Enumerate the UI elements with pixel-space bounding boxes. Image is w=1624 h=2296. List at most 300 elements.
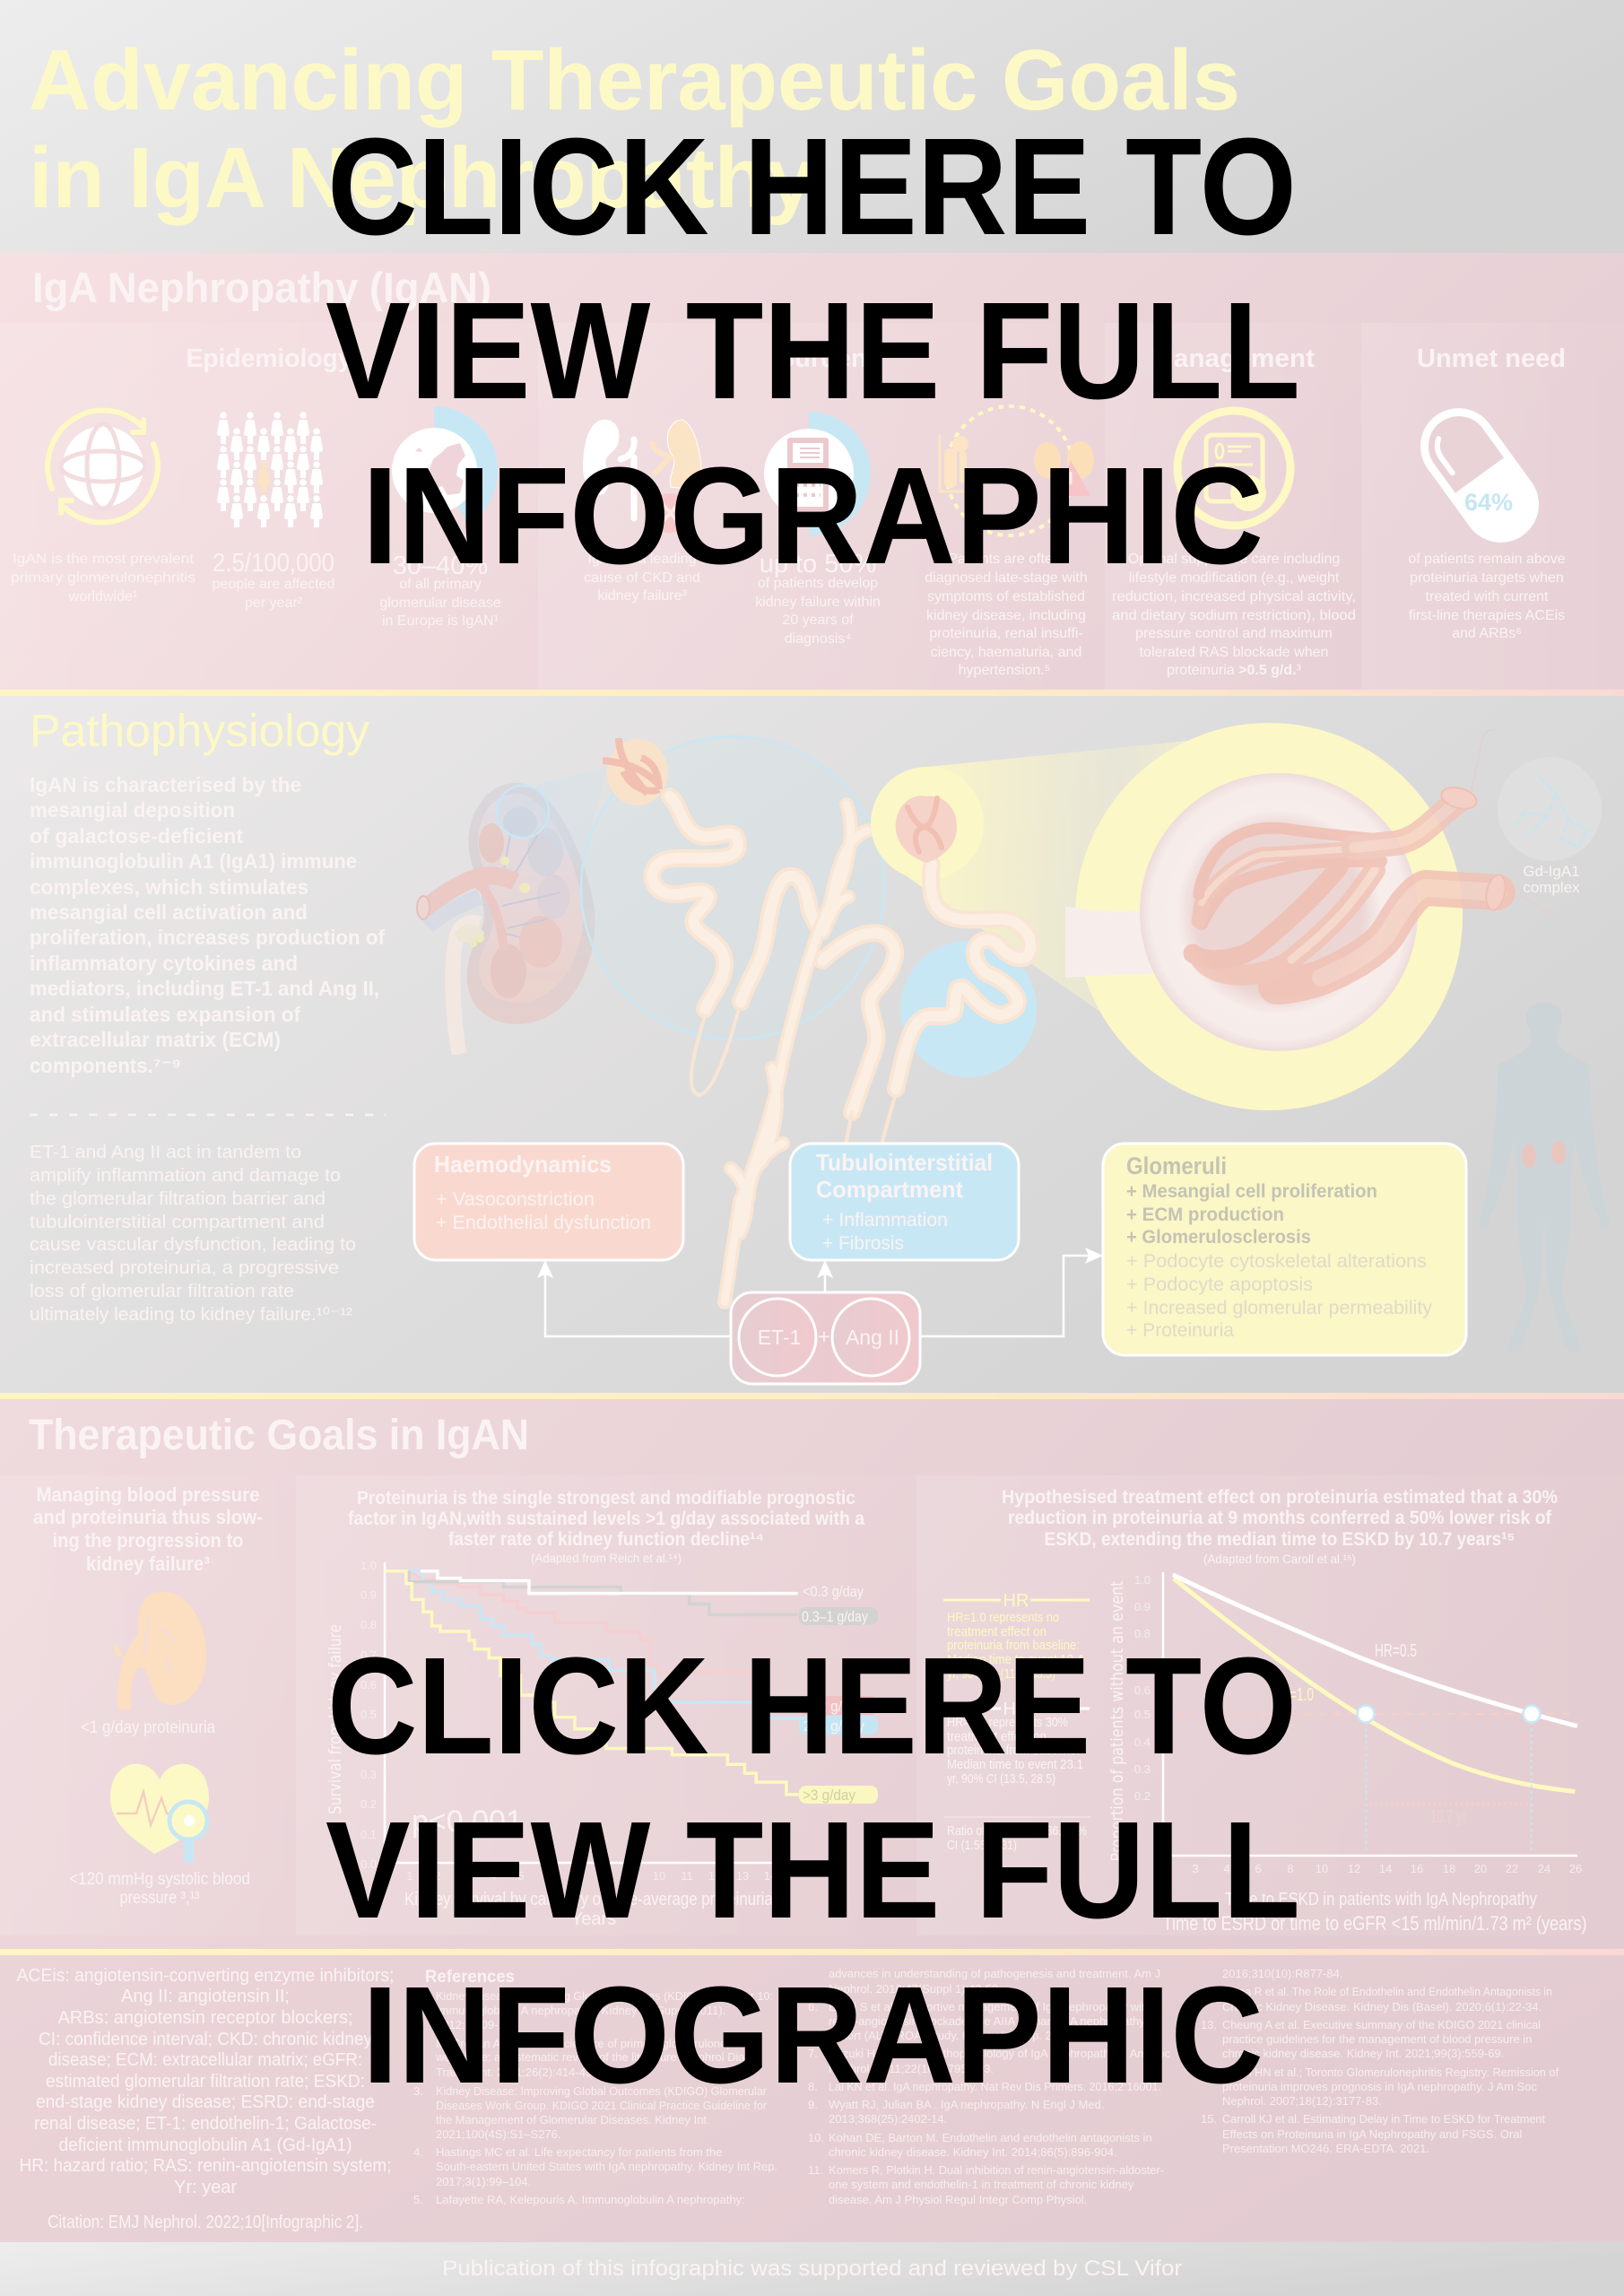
references column 2: disease. Am J Physiol Regul Integr Comp Physiol. [829, 2193, 1087, 2206]
unmet need text: of patients remain above [1408, 552, 1566, 567]
illustration: second tubule [896, 796, 1030, 1089]
curves and markers [1173, 1575, 1577, 1853]
references column 1: McGrogan A et al. The incidence of primary glomerulonephritis [436, 2037, 758, 2050]
subheading: Burden: Burden [776, 344, 867, 373]
references heading: References [425, 1968, 515, 1987]
x tick labels: 4 [490, 1869, 497, 1883]
references column 2: advances in understanding of pathogenesis and treatment. Am J [829, 1967, 1160, 1980]
y axis title: Proportion of patients without an event [1107, 1580, 1127, 1862]
abbreviations: Ang II: angiotensin II; [121, 1987, 290, 2006]
references column 1: 5. [413, 2193, 423, 2206]
legend: HR definitions: HR=1.0 represents no [947, 1610, 1059, 1625]
x tick labels: 2 [434, 1869, 441, 1883]
icon: globe [48, 411, 158, 523]
burden text 2: 20 years of [782, 613, 854, 628]
curves [385, 1571, 801, 1795]
label: blood pressure goal [69, 1870, 250, 1908]
references column 1: 2012;2:209-17. [436, 2018, 514, 2031]
illustration: large glomerulus [1065, 729, 1552, 1051]
y tick labels: 0.5 [360, 1708, 377, 1721]
text: treatment effect heading: ESKD, extending the median time to ESKD by 10.7 years¹⁵ [1044, 1529, 1515, 1550]
epidemiology text 1 [11, 552, 195, 604]
unmet need text [1408, 552, 1566, 641]
bold paragraph: components.⁷⁻⁹ [30, 1054, 181, 1077]
y tick labels: 0.8 [360, 1618, 377, 1631]
x tick labels: 12 [708, 1869, 721, 1883]
management text: lifestyle modification (e.g., weight [1129, 570, 1340, 586]
references column 2: 7. [808, 2047, 818, 2060]
epidemiology text 3: of all primary [399, 577, 482, 592]
x tick labels: 24 [1538, 1862, 1550, 1875]
abbreviations: HR: hazard ratio; RAS: renin-angiotensin system; [20, 2156, 391, 2176]
axes [1163, 1572, 1577, 1856]
burden text 3 [925, 552, 1088, 678]
references column 3: Carroll KJ et al. Estimating Delay in Time to ESKD for Treatment [1222, 2112, 1545, 2126]
legend: HR definitions: Median time to event 12.4 [947, 1652, 1083, 1667]
series labels: 1–2 g/day [803, 1698, 864, 1715]
references column 2: one system and endothelin-1 in treatment of chronic kidney [829, 2178, 1134, 2191]
references column 3: chronic kidney disease. Kidney Int. 2021;99(3):559-69. [1222, 2047, 1504, 2060]
illustration: kidney [417, 783, 595, 1054]
box: Glomeruli: + Mesangial cell proliferation [1126, 1181, 1377, 1202]
x tick labels: 6 [545, 1869, 552, 1883]
legend: HR definitions: treatment effect on [947, 1729, 1046, 1744]
burden text 2: diagnosis⁴ [785, 631, 851, 647]
references column 3: Presentation MO246. ERA-EDTA. 2021. [1222, 2142, 1429, 2155]
x tick labels: 13 [736, 1869, 749, 1883]
x axis titles [1162, 1890, 1587, 1935]
x tick labels: 26 [1569, 1862, 1582, 1875]
legend: HR definitions: yr, 90% CI (13.5, 28.5) [947, 1771, 1055, 1787]
legend: HR definitions: Median time to event 23.1 [947, 1757, 1083, 1772]
epidemiology text 2: people are affected [213, 577, 334, 592]
x tick labels: 16 [1411, 1862, 1423, 1875]
chart: kidney survival curves [326, 1559, 878, 1929]
box: ET-1 and Ang II: ET-1 [758, 1326, 801, 1349]
references column 3: proteinuria improves prognosis in IgA nephropathy. J Am Soc [1222, 2080, 1537, 2093]
references column 2: chronic kidney disease. Kidney Int. 2014;86(5):896-904. [829, 2145, 1117, 2159]
management text: pressure control and maximum [1135, 626, 1333, 641]
box: Haemodynamics: + Endothelial dysfunction [436, 1213, 651, 1233]
references column 1 [413, 1989, 777, 2206]
references column 1: 3. [413, 2084, 423, 2098]
y tick labels [360, 1559, 377, 1871]
references column 1: 1. [413, 1989, 423, 2003]
x axis title [404, 1890, 779, 1929]
footer: Publication of this infographic was supported and reviewed by CSL Vifor [442, 2257, 1182, 2281]
references column 2: 6. [808, 2000, 818, 2013]
abbreviations: Yr: year [174, 2178, 237, 2197]
box: Glomeruli: + Glomerulosclerosis [1126, 1227, 1311, 1248]
bold paragraph: extracellular matrix (ECM) [30, 1028, 281, 1051]
icon: Gd-IgA1 complex [1498, 757, 1602, 861]
references column 2: cohort (ALTEROA) study. Kidney Int Rep. 2019;4:1-8. [829, 2029, 1104, 2042]
text: treatment effect heading: reduction in proteinuria at 9 months conferred a 50% lower risk of [1008, 1508, 1552, 1528]
box: Glomeruli: + Podocyte cytoskeletal alterations [1126, 1251, 1427, 1272]
legend: HR definitions: proteinuria from baseline: [947, 1638, 1080, 1653]
x tick labels: 3 [1192, 1862, 1199, 1875]
panel: abbreviations and references [0, 1955, 1624, 2242]
title: in IgA Nephropathy [29, 130, 814, 226]
illustration: small glomerulus [603, 738, 668, 805]
icon: heart with gauge [110, 1764, 209, 1863]
abbreviations: Citation: EMJ Nephrol. 2022;10[Infographic 2]. [48, 2213, 363, 2232]
box: Haemodynamics [414, 1144, 683, 1260]
bold paragraph: mesangial cell activation and [30, 900, 308, 924]
references column 2: Eiichi S et al. Supportive management of IgA nephropathy with [829, 2000, 1151, 2013]
box: Glomeruli: + Increased glomerular permeability [1126, 1298, 1432, 1318]
references column 2: Suzuki H et al. The pathophysiology of IgA nephropathy. J Am Soc [829, 2047, 1171, 2060]
burden text 3: hypertension.⁵ [959, 663, 1050, 678]
box: ET-1 and Ang II: + [818, 1325, 830, 1348]
epidemiology text 2: per year² [245, 596, 303, 611]
references column 2: 10. [808, 2131, 824, 2144]
overlay call to action: bottom [326, 1629, 1300, 2112]
x tick labels [406, 1869, 777, 1883]
legend: HR definitions: treatment effect on [947, 1624, 1046, 1639]
x tick labels: 4 [1223, 1862, 1230, 1875]
legend: HR definitions: Ratio of medians=1.86, 90% [947, 1823, 1087, 1839]
epidemiology text 1: primary glomerulonephritis [11, 570, 195, 586]
x tick labels: 9 [629, 1869, 636, 1883]
management text: and dietary sodium restriction), blood [1112, 608, 1356, 623]
x axis title: Years [571, 1909, 616, 1929]
burden text 3: ciency, haematuria, and [931, 645, 1081, 660]
icon: patient record donut [764, 412, 871, 535]
y tick labels: 0.3 [360, 1768, 377, 1781]
references column 2: Nephrol. 2018;47(Suppl 1):43-53. [829, 1982, 1002, 1996]
icon: population grid [217, 412, 323, 527]
abbreviations: ACEis: angiotensin-converting enzyme inhibitors; [16, 1966, 395, 1986]
icon: management clipboard [1177, 411, 1290, 526]
label: blood pressure goal: <120 mmHg systolic blood [69, 1870, 250, 1889]
x tick labels: 5 [517, 1869, 525, 1883]
references column 1: the Management of Glomerular Diseases. Kidney Int. [436, 2113, 710, 2126]
box: Glomeruli: Glomeruli [1126, 1152, 1227, 1179]
x tick labels: 7 [573, 1869, 580, 1883]
series labels: <0.3 g/day [803, 1583, 864, 1600]
legend: HR definitions: HR=0.5 represents 30% [947, 1715, 1068, 1730]
label: Gd-IgA1 complex: complex [1523, 879, 1580, 896]
x tick labels: 14 [1379, 1862, 1392, 1875]
x tick labels: 10 [1316, 1862, 1328, 1875]
legend: HR definitions: HR [1003, 1700, 1029, 1719]
x axis title: Kidney survival by category of time-average proteinuria⁹ [404, 1890, 779, 1909]
y tick labels: 0.2 [360, 1797, 377, 1811]
arrows from ET-1 and Ang II [537, 1248, 1103, 1336]
heading: IgA Nephropathy: IgA Nephropathy (IgAN) [32, 264, 491, 311]
unmet need text: treated with current [1426, 589, 1549, 604]
bold paragraph: proliferation, increases production of [30, 926, 385, 949]
references column 1: South-eastern United States with IgA nephropathy. Kidney Int Rep. [436, 2160, 777, 2173]
references column 3: 15. [1201, 2112, 1217, 2126]
references column 2: 8. [808, 2080, 818, 2093]
text: managing blood pressure: ing the progression to [52, 1529, 244, 1552]
abbreviations: ARBs: angiotensin receptor blockers; [57, 2008, 353, 2028]
y tick labels: 0.8 [1134, 1627, 1151, 1640]
abbreviations: end-stage kidney disease; ESRD: end-stage [36, 2092, 375, 2112]
references column 3 [1201, 1967, 1559, 2155]
x tick labels: 12 [1348, 1862, 1360, 1875]
burden text 3: symptoms of established [927, 589, 1085, 604]
y tick labels: 0.6 [360, 1678, 377, 1692]
icon: late-stage diagnosis [940, 406, 1094, 535]
text: treatment effect heading [1002, 1487, 1558, 1550]
epidemiology text 2 [213, 549, 334, 611]
y tick labels: 0.1 [360, 1828, 377, 1841]
panel: IgA Nephropathy overview [0, 253, 1624, 691]
references column 2: Nephrol. 2011;22(10):1795-803. [829, 2062, 994, 2075]
references column 1: Diseases Work Group. KDIGO 2021 Clinical Practice Guideline for [436, 2099, 768, 2112]
references column 3: Chronic Kidney Disease. Kidney Dis (Basel). 2020;6(1):22-34. [1222, 2000, 1541, 2013]
references column 3: 13. [1201, 2018, 1217, 2031]
box: Tubulointerstitial Compartment: + Inflammation [822, 1210, 948, 1231]
references column 1: worldwide: a systematic review of the literature. Nephrol Dial [435, 2050, 748, 2064]
text: adapted from Caroll: (Adapted from Caroll et al.¹⁵) [1203, 1552, 1356, 1566]
box: Glomeruli [1103, 1144, 1466, 1355]
x tick labels: 20 [1474, 1862, 1487, 1875]
legend: HR definitions [943, 1591, 1090, 1853]
references column 3: Cheung A et al. Executive summary of the KDIGO 2021 clinical [1222, 2018, 1541, 2031]
epidemiology text 1: IgAN is the most prevalent [13, 552, 195, 567]
burden text 3: diagnosed late-stage with [925, 570, 1088, 586]
y tick labels: 0.9 [360, 1588, 377, 1602]
bold paragraph: inflammatory cytokines and [30, 952, 298, 975]
box: Haemodynamics: + Vasoconstriction [436, 1189, 595, 1210]
overlay call to action: bottom: VIEW THE FULL [326, 1793, 1300, 1947]
icon: pill 64% [1411, 399, 1549, 552]
management text: reduction, increased physical activity, [1112, 589, 1356, 604]
burden text 2 [755, 550, 881, 647]
subheading: Epidemiology: Epidemiology [187, 344, 352, 373]
y tick labels: 0.9 [1134, 1600, 1151, 1613]
bold paragraph: immunoglobulin A1 (IgA1) immune [30, 849, 357, 873]
management text: tolerated RAS blockade when [1140, 645, 1328, 660]
references column 2: Wyatt RJ, Julian BA . IgA nephropathy. N Engl J Med. [829, 2098, 1104, 2111]
title [29, 32, 1240, 226]
epidemiology text 2: 2.5/100,000 [213, 549, 334, 578]
y tick labels: 0.0 [360, 1857, 377, 1871]
label: Gd-IgA1 complex: Gd-IgA1 [1523, 863, 1580, 880]
y axis title: Survival from kidney failure [326, 1624, 345, 1814]
unmet need text: and ARBs⁶ [1452, 626, 1522, 641]
unmet need text: first-line therapies ACEis [1409, 608, 1565, 623]
burden text 1: kidney failure³ [597, 588, 687, 604]
curve labels: HR=0.5 [1375, 1641, 1417, 1661]
epidemiology text 3: in Europe is IgAN¹ [382, 613, 499, 629]
references column 2 [808, 1967, 1171, 2206]
regular paragraph: the glomerular filtration barrier and [30, 1189, 326, 1209]
label: proteinuria goal: <1 g/day proteinuria [81, 1718, 215, 1737]
heading: Pathophysiology: Pathophysiology [30, 705, 369, 756]
abbreviations [16, 1966, 395, 2232]
label: blood pressure goal: pressure ³,¹³ [120, 1889, 199, 1908]
box: Glomeruli: + Podocyte apoptosis [1126, 1274, 1313, 1295]
bold paragraph: mesangial deposition [30, 798, 235, 822]
x tick labels: 8 [601, 1869, 608, 1883]
unmet need text: proteinuria targets when [1410, 570, 1564, 586]
text: proteinuria heading: Proteinuria is the single strongest and modifiable prognostic [357, 1488, 855, 1509]
x tick labels: 3 [462, 1869, 469, 1883]
label: Gd-IgA1 complex [1523, 863, 1580, 896]
abbreviations: renal disease; ET-1: endothelin-1; Galactose- [34, 2114, 377, 2134]
references column 2: 11. [808, 2163, 823, 2177]
x tick labels: 8 [1287, 1862, 1294, 1875]
references column 1: Kidney Disease: Improving Global Outcomes (KDIGO). Chapter 10: [436, 1989, 773, 2003]
series labels: 0.3–1 g/day [802, 1608, 868, 1625]
icon: human silhouette [1478, 1003, 1611, 1353]
overlay call to action: top: CLICK HERE TO [327, 109, 1297, 264]
references column 2: 9. [808, 2098, 818, 2111]
icon: Europe donut 30-40% [392, 406, 498, 525]
p value: p<0.001 [412, 1805, 523, 1839]
bold paragraph [30, 773, 385, 1077]
references column 1: Kidney Disease: Improving Global Outcomes (KDIGO) Glomerular [436, 2084, 768, 2098]
text: proteinuria heading: faster rate of kidney function decline¹⁴ [448, 1529, 764, 1550]
epidemiology text 3 [379, 552, 501, 629]
x tick labels: 10 [653, 1869, 665, 1883]
y tick labels: 0.4 [360, 1738, 377, 1752]
text: adapted from Reich: (Adapted from Reich et al.¹⁴) [531, 1551, 682, 1565]
references column 1: Transplant. 2011;26(2):414-430. [436, 2066, 602, 2079]
chart: time to ESKD: HR=1.0 [1272, 1685, 1314, 1705]
title: Advancing Therapeutic Goals [29, 32, 1240, 128]
subheading: Unmet need: Unmet need [1417, 344, 1566, 373]
burden text 3: proteinuria, renal insuffi- [929, 626, 1083, 641]
references column 2: Kohan DE, Barton M. Endothelin and endothelin antagonists in [829, 2131, 1152, 2144]
overlay call to action: bottom: INFOGRAPHIC [362, 1958, 1264, 2112]
box: Haemodynamics: Haemodynamics [434, 1151, 612, 1178]
series labels: 2–3 g/day [803, 1718, 864, 1735]
references column 3: Reich HN et al.; Toronto Glomerulonephritis Registry. Remission of [1222, 2066, 1559, 2079]
references column 3: Nephrol. 2007;18(12):3177-83. [1222, 2094, 1382, 2108]
overlay call to action: top: INFOGRAPHIC [362, 439, 1264, 593]
burden text 1 [584, 552, 700, 604]
legend: HR definitions: proteinuria from baseline: [947, 1743, 1080, 1758]
footer [0, 2242, 1624, 2296]
regular paragraph: ultimately leading to kidney failure.¹⁰⁻¹² [30, 1305, 352, 1325]
x tick labels: 11 [681, 1869, 693, 1883]
box: ET-1 and Ang II: Ang II [846, 1326, 899, 1349]
icon: pill 64%: 64% [1464, 489, 1513, 516]
management text: proteinuria >0.5 g/d.³ [1167, 663, 1302, 678]
references column 1: Hastings MC et al. Life expectancy for patients from the [436, 2145, 722, 2159]
references column 3: 2016;310(10):R877-84. [1222, 1967, 1342, 1980]
abbreviations: CI: confidence interval; CKD: chronic kidney [39, 2030, 372, 2049]
regular paragraph: loss of glomerular filtration rate [30, 1282, 294, 1301]
box: Tubulointerstitial Compartment [790, 1144, 1019, 1260]
illustration: nephron tubules [652, 796, 895, 1302]
text: proteinuria heading: factor in IgAN,with sustained levels >1 g/day associated with a [348, 1509, 864, 1529]
box: Tubulointerstitial Compartment: + Fibrosis [822, 1233, 904, 1254]
text: managing blood pressure: and proteinuria thus slow- [33, 1506, 263, 1528]
references column 3: 12. [1201, 1985, 1217, 1998]
management text: Optimal supportive care including [1128, 552, 1340, 567]
references column 2: 2013;368(25):2402-14. [829, 2112, 947, 2126]
overlay call to action: top: VIEW THE FULL [326, 274, 1300, 428]
bold paragraph: IgAN is characterised by the [30, 773, 301, 796]
icon: kidney [114, 1592, 206, 1709]
x tick labels: 14 [764, 1869, 777, 1883]
illustration: zoom circle over nephron [497, 736, 884, 1039]
series labels [799, 1583, 878, 1804]
legend: HR definitions: yr, 90% CI (11.8, 33.5) [947, 1666, 1055, 1682]
x tick labels: 6 [1255, 1862, 1262, 1875]
burden text 2: of patients develop [758, 576, 878, 591]
x tick labels: 22 [1506, 1862, 1518, 1875]
references column 3: practice guidelines for the management of blood pressure in [1222, 2032, 1532, 2046]
abbreviations: deficient immunoglobulin A1 (Gd-IgA1) [59, 2135, 352, 2155]
epidemiology text 3: glomerular disease [379, 596, 501, 611]
chart: time to ESKD [1107, 1572, 1587, 1935]
references column 1: 4. [413, 2145, 423, 2159]
references column 1: Lafayette RA, Kelepouris A. Immunoglobulin A nephropathy: [436, 2193, 745, 2206]
x axis titles: Time to ESKD in patients with IgA Nephropathy [1225, 1890, 1537, 1909]
burden text 2: up to 50% [760, 550, 876, 578]
references column 1: Immunoglobulin A nephropathy. Kidney Int Suppl (2011). [436, 2004, 725, 2017]
text: managing blood pressure [33, 1483, 263, 1575]
text: managing blood pressure: Managing blood pressure [36, 1483, 260, 1506]
y tick labels: 0.2 [1134, 1789, 1151, 1803]
regular paragraph: amplify inflammation and damage to [30, 1166, 341, 1186]
burden text 3: Patients are often [948, 552, 1061, 567]
references column 2: renin-angiotensin blockade, the AIIA primary IgA nephropathy [829, 2014, 1145, 2028]
references column 1: 2017;3(1):99–104. [436, 2175, 531, 2188]
regular paragraph: tubulointerstitial compartment and [30, 1213, 325, 1232]
overlay call to action: bottom: CLICK HERE TO [327, 1629, 1297, 1783]
references column 1: 2021;100(4S):S1–S276. [436, 2127, 561, 2141]
references column 3: Raina R et al. The Role of Endothelin and Endothelin Antagonists in [1222, 1985, 1552, 1998]
references column 2: Lai KN et al. IgA nephropathy. Nat Rev Dis Primers. 2016;2:16001. [829, 2080, 1161, 2093]
box: Glomeruli: + Proteinuria [1126, 1320, 1234, 1341]
box: ET-1 and Ang II [731, 1292, 920, 1384]
y tick labels: 1.0 [1134, 1573, 1151, 1587]
subheading: Management: Management [1151, 344, 1315, 373]
references column 3: 14. [1201, 2066, 1217, 2079]
legend: HR definitions: HR [1003, 1591, 1029, 1611]
y tick labels: 1.0 [360, 1559, 377, 1572]
references column 3: Effects on Proteinuria in IgA Nephropathy and FSGS. Oral [1222, 2127, 1522, 2141]
overlay call to action: top [326, 109, 1300, 593]
x tick labels: 1 [406, 1869, 413, 1883]
bold paragraph: and stimulates expansion of [30, 1003, 300, 1026]
epidemiology text 1: worldwide¹ [68, 589, 137, 604]
panel: Therapeutic Goals [0, 1399, 1624, 1949]
regular paragraph [30, 1143, 356, 1325]
y tick labels: 0.7 [360, 1648, 377, 1662]
y tick labels: 0.5 [1134, 1708, 1151, 1721]
chart: time to ESKD: 10.7 yr [1430, 1807, 1466, 1827]
heading: Therapeutic Goals: Therapeutic Goals in IgAN [29, 1412, 529, 1459]
burden text 2: kidney failure within [755, 595, 881, 610]
x tick labels: 18 [1443, 1862, 1455, 1875]
text: treatment effect heading: Hypothesised treatment effect on proteinuria estimated that a 30% [1002, 1487, 1558, 1508]
y tick labels: 0.6 [1134, 1683, 1151, 1697]
burden text 3: kidney disease, including [926, 608, 1086, 623]
text: proteinuria heading [348, 1488, 864, 1550]
header band [0, 0, 1624, 253]
regular paragraph: ET-1 and Ang II act in tandem to [30, 1143, 301, 1162]
box: Glomeruli: + ECM production [1126, 1205, 1284, 1225]
bold paragraph: mediators, including ET-1 and Ang II, [30, 977, 379, 1000]
box: Tubulointerstitial Compartment: Tubulointerstitial [816, 1149, 993, 1176]
y tick labels: 0.3 [1134, 1762, 1151, 1776]
icon: kidneys [583, 420, 701, 533]
x tick labels [1192, 1862, 1582, 1875]
panel: Pathophysiology [0, 696, 1624, 1393]
text: managing blood pressure: kidney failure³ [86, 1552, 210, 1575]
series labels: >3 g/day [803, 1787, 855, 1804]
